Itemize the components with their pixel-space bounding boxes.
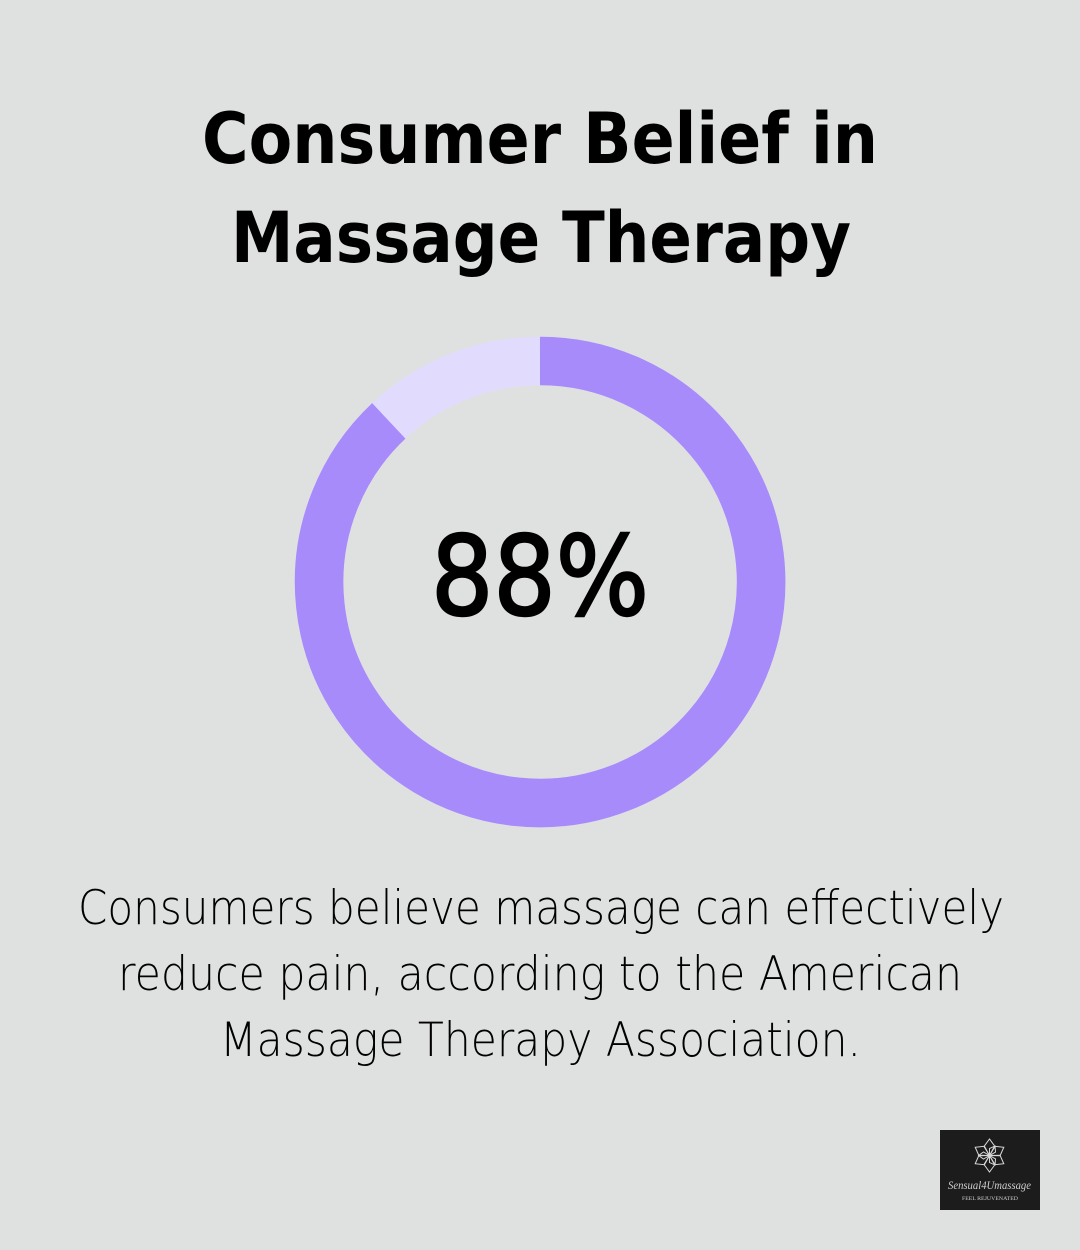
logo tagline: FEEL REJUVENATED [962, 1196, 1018, 1202]
description text [78, 881, 1004, 1068]
description text: reduce pain, according to the American [118, 947, 962, 1002]
title [202, 98, 878, 279]
title: Massage Therapy [231, 197, 851, 279]
title: Consumer Belief in [202, 98, 878, 180]
donut chart: 88% [319, 361, 761, 803]
big number: 88% [431, 512, 649, 640]
description text: Massage Therapy Association. [220, 1013, 861, 1068]
logo badge [940, 1130, 1040, 1210]
logo name: Sensual4Umassage [948, 1178, 1032, 1192]
ring remainder: 12% [319, 361, 761, 803]
ring value: 88% [319, 361, 761, 803]
icon: lotus flower [972, 1139, 1007, 1172]
